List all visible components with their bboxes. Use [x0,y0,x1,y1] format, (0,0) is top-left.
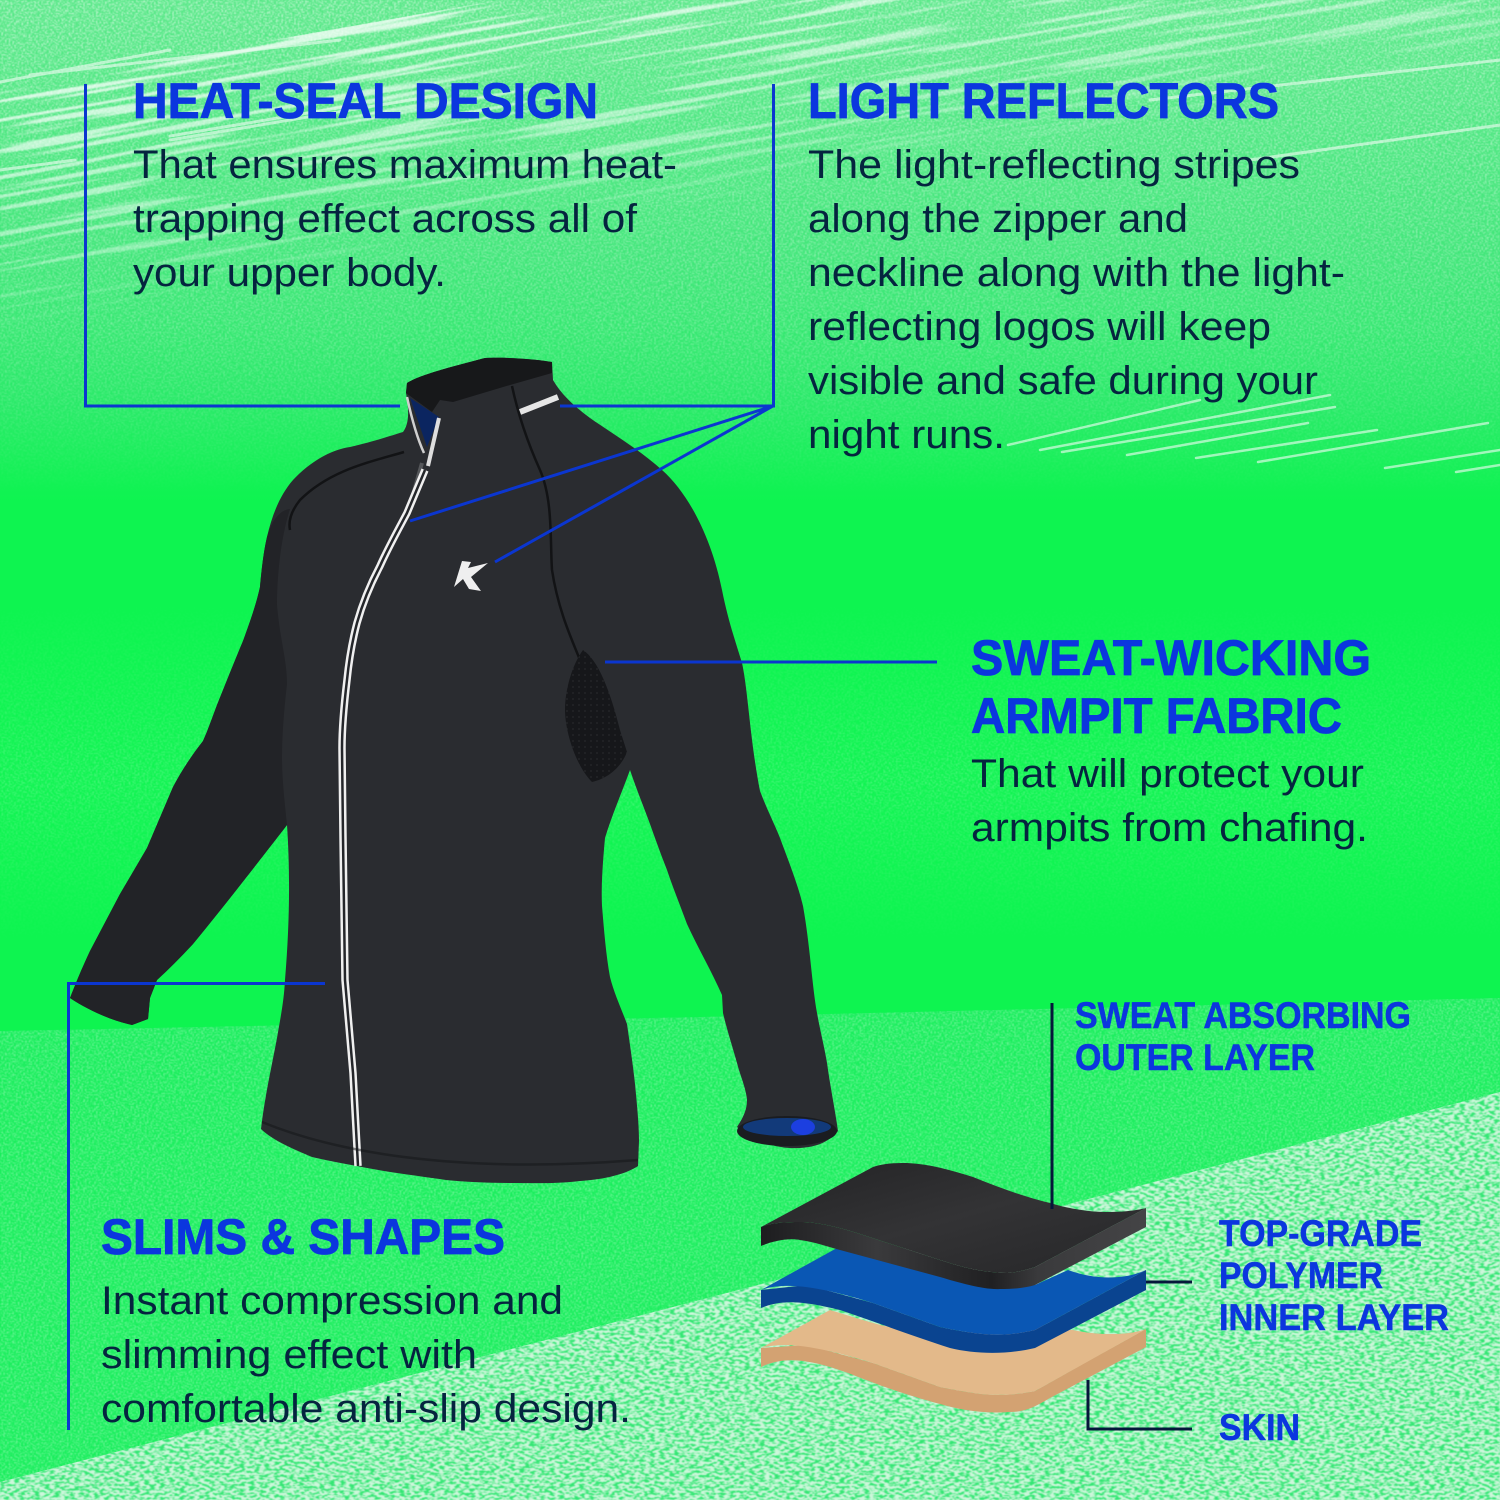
leader: outer layer [1050,1003,1054,1209]
panel: slims and shapes [101,1209,631,1431]
body text: slimming effect with [101,1333,477,1377]
label: top-grade polymer inner layer: INNER LAYER [1219,1297,1449,1338]
body text: comfortable anti-slip design. [101,1387,631,1431]
heading [971,630,1371,744]
body text: reflecting logos will keep [808,305,1271,349]
body text [808,143,1345,457]
K logo [454,561,488,591]
panel: light reflectors [808,73,1345,457]
blue polymer layer [761,1248,1146,1353]
zipper pull [412,463,422,498]
heading: HEAT-SEAL DESIGN [133,73,598,129]
panel: heat-seal design [133,73,677,295]
label: sweat absorbing outer layer: OUTER LAYER [1075,1037,1315,1078]
body text: along the zipper and [808,197,1188,241]
label: top-grade polymer inner layer: TOP-GRADE [1219,1213,1422,1254]
fabric layers diagram [761,1163,1146,1413]
body text: night runs. [808,413,1005,457]
label: top-grade polymer inner layer: POLYMER [1219,1255,1383,1296]
right cuff opening [737,1116,837,1146]
body text: neckline along with the light- [808,251,1345,295]
collar blue lining [410,398,439,447]
label: skin: SKIN [1219,1407,1300,1448]
leader: slims and shapes [68,984,325,1430]
leader: inner layer [1146,1280,1192,1284]
body text: Instant compression and [101,1279,563,1323]
raglan seams [262,386,638,1165]
panel: sweat-wicking armpit fabric [971,630,1371,850]
body text: That will protect your [971,752,1364,796]
leader: skin [1088,1380,1192,1429]
leader: sweat-wicking [605,660,937,664]
zipper center [342,470,425,1166]
jacket [70,358,838,1183]
body text: armpits from chafing. [971,806,1368,850]
body text: your upper body. [133,251,446,295]
heading: LIGHT REFLECTORS [808,73,1279,129]
body text: visible and safe during your [808,359,1318,403]
collar inner shadow [406,358,552,412]
label: top-grade polymer inner layer [1219,1213,1449,1338]
collar reflector stripe [520,397,558,412]
body text [101,1279,631,1431]
body text: trapping effect across all of [133,197,638,241]
body text: That ensures maximum heat- [133,143,677,187]
body text [133,143,677,295]
jacket body silhouette [70,358,838,1183]
heading: SWEAT-WICKING [971,630,1371,686]
body text [971,752,1368,850]
right collar reflective strip [428,418,439,466]
label: sweat absorbing outer layer [1075,995,1411,1078]
left collar reflective strip [407,397,424,453]
left arm shading [70,509,290,1025]
heading: SLIMS & SHAPES [101,1209,505,1265]
black outer layer [761,1163,1146,1289]
leader: light reflectors [410,84,774,562]
armpit mesh panel [565,650,627,782]
skin layer [761,1310,1146,1413]
leader lines [68,84,1192,1430]
leader: heat-seal design [86,84,400,406]
body text: The light-reflecting stripes [808,143,1300,187]
label: sweat absorbing outer layer: SWEAT ABSORBING [1075,995,1411,1036]
zipper reflective stripe [342,470,425,1166]
heading: ARMPIT FABRIC [971,688,1342,744]
